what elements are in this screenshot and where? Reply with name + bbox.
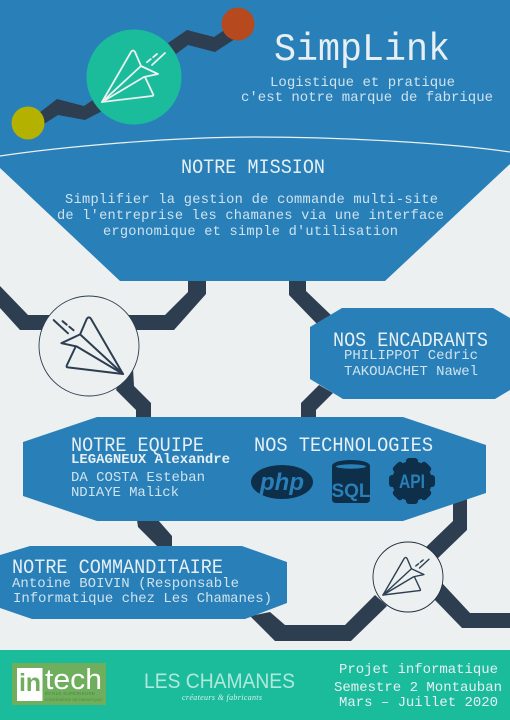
panel: commanditaire: NOTRE COMMANDITAIRE [12,557,223,580]
logo: intech: ÉCOLE SUPÉRIEURE [45,690,95,696]
tagline: Logistique et pratique [270,75,455,91]
icon: orange dot [222,8,254,40]
icon: api gear [389,458,435,504]
footer project info: Projet informatique [339,662,498,678]
panel: commanditaire: Informatique chez Les Chamanes) [13,591,272,607]
icon: paper plane circle right [373,542,443,612]
icon: olive dot [12,106,44,140]
tagline [241,75,493,106]
panel: equipe and technologies: NOTRE EQUIPE [71,435,204,458]
logo: intech: in [19,669,41,697]
header timeline line [39,25,238,124]
panel: header and mission [0,0,510,281]
logo: les chamanes [144,670,295,702]
logo: les chamanes: LES CHAMANES [144,670,295,693]
connector: network lines [0,280,510,641]
footer project info [334,662,502,711]
footer project info: Mars – Juillet 2020 [339,695,498,711]
icon: sql database [331,460,371,503]
panel: equipe and technologies: LEGAGNEUX Alexandre [71,452,230,468]
footer band [0,650,510,720]
icon: sql database: SQL [331,481,371,502]
heading: mission: NOTRE MISSION [181,157,325,180]
mission text: de l'entreprise les chamanes via une interface [57,209,444,224]
panel: commanditaire [0,546,287,619]
logo: intech: tech [45,664,102,696]
logo: intech: D'INGÉNIERIE INFORMATIQUE [45,697,102,702]
footer project info: Semestre 2 Montauban [334,680,502,696]
panel: equipe and technologies: DA COSTA Esteban [71,470,205,486]
icon: paper plane circle left [39,296,139,396]
panel: equipe and technologies: NOS TECHNOLOGIES [254,435,433,458]
panel: encadrants: PHILIPPOT Cedric [344,348,478,364]
title: SimpLink [274,28,450,72]
panel: encadrants [310,308,510,399]
mission text [57,193,444,240]
icon: api gear: API [399,472,425,493]
tagline: c'est notre marque de fabrique [241,90,493,106]
panel: equipe and technologies: NDIAYE Malick [71,485,179,501]
panel: encadrants: NOS ENCADRANTS [333,330,488,353]
mission text: ergonomique et simple d'utilisation [103,225,398,240]
logo: intech [12,663,106,705]
mission text: Simplifier la gestion de commande multi-site [65,193,438,208]
icon: php: php [259,469,304,496]
panel: commanditaire: Antoine BOIVIN (Responsable [12,576,239,592]
panel: equipe and technologies [23,417,486,521]
icon: php [251,465,313,499]
panel: encadrants: TAKOUACHET Nawel [344,364,478,380]
icon: paper plane badge [86,30,182,124]
logo: les chamanes: créateurs & fabricants [182,693,262,702]
